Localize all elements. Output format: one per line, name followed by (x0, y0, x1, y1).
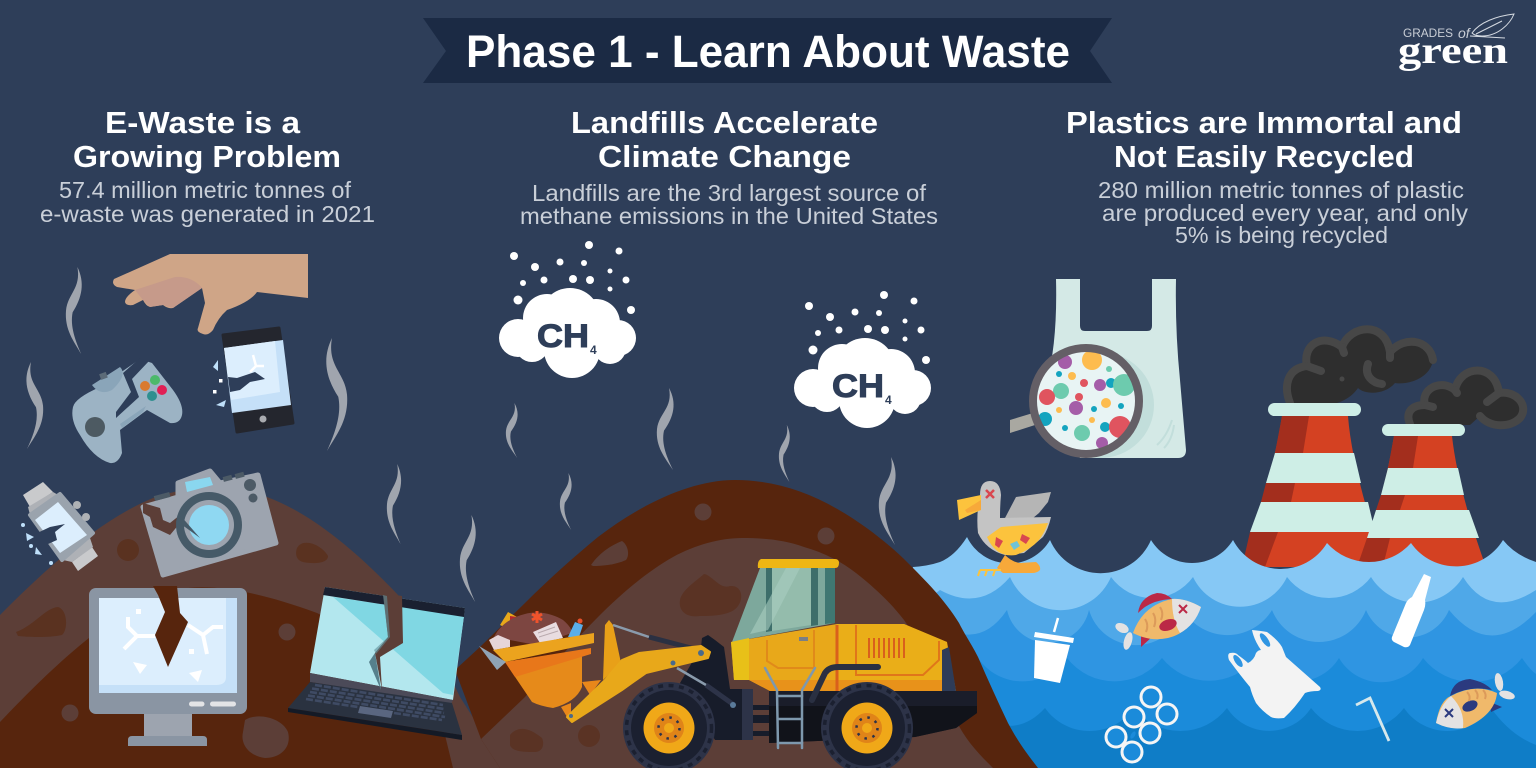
icon: methane cloud right: 4 (885, 393, 892, 407)
smokestack 2 (1356, 370, 1523, 570)
text: landfill statistic: Landfills are the 3rd largest source of (532, 180, 927, 206)
icon: methane cloud left: CH (537, 318, 589, 354)
text: plastic statistic: 280 million metric tonnes of plastic (1098, 177, 1464, 203)
heading: e-waste: E-Waste is a (105, 105, 301, 140)
loader arm (567, 620, 769, 740)
icon: broken game controller (72, 358, 182, 463)
icon: front loader with trash (479, 559, 977, 768)
icon: broken camera (143, 471, 276, 575)
text: plastic statistic: are produced every year, and only (1102, 200, 1469, 226)
icon: broken monitor (89, 586, 247, 746)
heading: plastics: Not Easily Recycled (1114, 139, 1414, 174)
heading: landfills: Climate Change (598, 139, 851, 174)
heading: e-waste: Growing Problem (73, 139, 341, 174)
icon: plastic cup (1034, 618, 1074, 683)
text: e-waste statistic (40, 177, 375, 227)
text: plastic statistic (1098, 177, 1469, 248)
icon: methane cloud right (794, 291, 931, 428)
landfill mound (455, 480, 1038, 768)
heading: plastics (1066, 105, 1462, 174)
icon: methane cloud left: 4 (590, 343, 597, 357)
cab (732, 559, 839, 642)
loader body (731, 624, 977, 743)
icon: drinking straw (1356, 698, 1389, 741)
icon: dead seabird (957, 481, 1051, 576)
icon: plastic bottle (1392, 574, 1431, 647)
wheels (623, 682, 913, 768)
bucket (479, 633, 601, 717)
icon: six-pack rings (1106, 687, 1177, 762)
text: e-waste statistic: 57.4 million metric tonnes of (59, 177, 352, 203)
smokestack 1 (1242, 329, 1433, 567)
icon: plastic bag with magnifier (1010, 279, 1186, 458)
logo: Grades of Green (1398, 14, 1514, 72)
text: e-waste statistic: e-waste was generated in 2021 (40, 201, 375, 227)
text: plastic statistic: 5% is being recycled (1175, 222, 1388, 248)
e-waste mound (0, 488, 505, 768)
title banner: Phase 1 - Learn About Waste (466, 26, 1070, 77)
heading: landfills (571, 105, 878, 174)
icon: methane cloud right: CH (832, 368, 884, 404)
icon: fish right (1436, 672, 1516, 728)
text: landfill statistic: methane emissions in the United States (520, 203, 938, 229)
icon: broken smartwatch (21, 482, 98, 571)
logo: Grades of Green: of (1458, 25, 1472, 41)
icon: methane cloud left (499, 241, 636, 378)
smoke wisps (26, 267, 896, 602)
heading: plastics: Plastics are Immortal and (1066, 105, 1462, 140)
icon: plastic bag floating (1228, 630, 1321, 718)
text: landfill statistic (520, 180, 938, 229)
logo: Grades of Green: GRADES (1403, 28, 1453, 40)
heading: landfills: Landfills Accelerate (571, 105, 878, 140)
ladder (765, 668, 815, 748)
icon: broken laptop (288, 587, 465, 740)
logo: Grades of Green: green (1398, 30, 1508, 72)
ocean waves (900, 537, 1536, 768)
icon: broken phone (213, 328, 293, 432)
trash pile (489, 611, 583, 650)
heading: e-waste (73, 105, 341, 174)
icon: hand (113, 254, 308, 334)
icon: fish left (1114, 593, 1201, 651)
